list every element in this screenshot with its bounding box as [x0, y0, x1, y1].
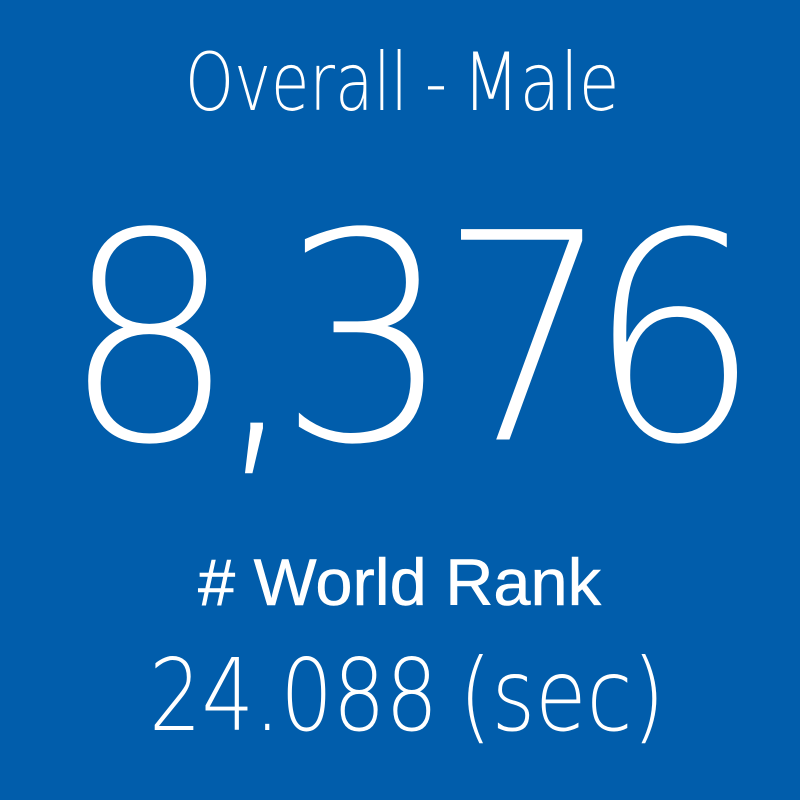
heading: Overall - Male: Male — [462, 36, 620, 129]
value: 24.088 (sec): (sec) — [459, 637, 665, 754]
heading: Overall - Male: Overall — [185, 36, 408, 129]
big number: 8,376: 8,376 — [62, 170, 761, 509]
heading: Overall - Male: - — [425, 36, 447, 129]
value: 24.088 (sec): 24.088 — [149, 637, 438, 754]
label: # World Rank: # World Rank — [198, 545, 602, 619]
